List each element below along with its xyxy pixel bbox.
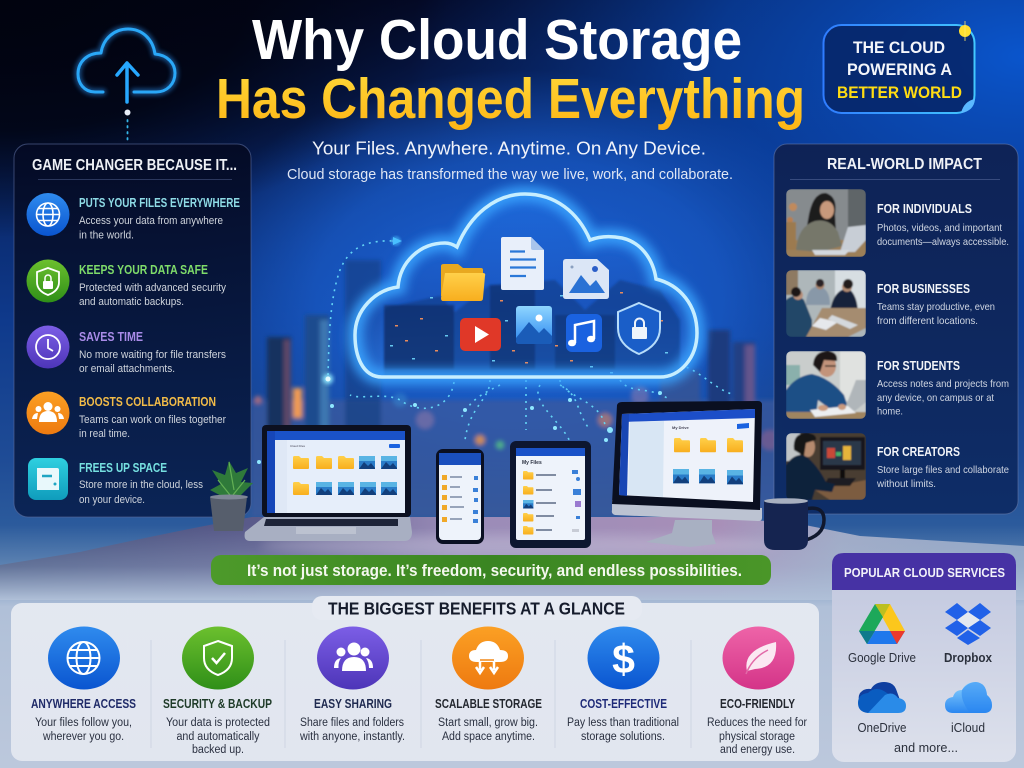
item: for individuals: documents—always accessible. — [877, 236, 1009, 248]
badge: the cloud powering a better world — [824, 21, 975, 113]
item: frees up space — [28, 458, 203, 506]
laptop — [245, 425, 412, 541]
icon: music — [566, 314, 602, 352]
icon: shield lock — [618, 303, 660, 354]
item: for students: Access notes and projects from — [877, 378, 1009, 390]
title line 1: Why Cloud Storage — [252, 8, 742, 72]
panel heading: real-world impact: REAL-WORLD IMPACT — [827, 156, 982, 173]
icon: folder — [441, 264, 485, 301]
panel: real-world impact — [774, 144, 1018, 514]
item: boosts collaboration — [26, 392, 226, 440]
item: frees up space: on your device. — [79, 494, 145, 506]
photo: business team — [786, 270, 866, 337]
benefit: easy sharing: EASY SHARING — [314, 697, 392, 711]
badge: the cloud powering a better world: POWERING A — [847, 60, 952, 79]
benefit: scalable storage — [435, 626, 542, 743]
icon: document — [501, 237, 544, 290]
logo: icloud — [945, 682, 992, 735]
photo: student writing — [786, 351, 866, 419]
item: saves time: No more waiting for file transfers — [79, 349, 226, 361]
title line 2: Has Changed Everything — [216, 67, 805, 131]
benefit: scalable storage: Add space anytime. — [442, 731, 535, 743]
benefit: cost-effective: Pay less than traditional — [567, 717, 679, 729]
panel: popular cloud services — [832, 553, 1016, 762]
benefit: easy sharing: Share files and folders — [300, 717, 404, 729]
item: keeps your data safe — [26, 260, 226, 308]
panel: game changer — [14, 144, 251, 517]
phone — [436, 449, 484, 544]
logo: onedrive — [858, 682, 907, 735]
item: for creators: FOR CREATORS — [877, 445, 960, 459]
plant — [210, 461, 253, 531]
item: boosts collaboration: Teams can work on files together — [79, 414, 226, 426]
item: for creators: without limits. — [876, 478, 936, 490]
panel heading: benefits: THE BIGGEST BENEFITS AT A GLANCE — [328, 598, 625, 618]
benefit: anywhere access — [31, 626, 136, 743]
benefit: eco-friendly: and energy use. — [720, 744, 795, 756]
item: boosts collaboration: BOOSTS COLLABORATION — [79, 395, 216, 409]
badge: the cloud powering a better world: THE CLOUD — [853, 38, 945, 57]
item: keeps your data safe: and automatic backups. — [79, 296, 184, 308]
item: puts your files everywhere: Access your data from anywhere — [79, 215, 223, 227]
monitor: My Drive — [672, 425, 689, 430]
benefit: scalable storage: SCALABLE STORAGE — [435, 697, 542, 711]
coffee mug — [764, 498, 824, 550]
logo: onedrive: OneDrive — [858, 721, 907, 735]
item: for students — [877, 359, 1009, 418]
table surface — [0, 517, 1024, 600]
logo: dropbox: Dropbox — [944, 651, 992, 665]
tablet — [510, 441, 591, 548]
panel heading: game changer: GAME CHANGER BECAUSE IT... — [32, 157, 237, 174]
logo: google drive: Google Drive — [848, 651, 916, 665]
subtitle: Cloud storage has transformed the way we live, work, and collaborate. — [287, 166, 733, 183]
city skyline backdrop — [251, 260, 781, 517]
logo: google drive — [848, 604, 916, 665]
tagline: Your Files. Anywhere. Anytime. On Any Device. — [312, 138, 706, 158]
icon: photo — [516, 306, 552, 344]
item: puts your files everywhere — [26, 193, 240, 242]
item: for individuals: FOR INDIVIDUALS — [877, 202, 972, 216]
icon: image document — [563, 259, 609, 299]
photo: creator at monitor — [786, 433, 866, 500]
item: for students: FOR STUDENTS — [877, 359, 960, 373]
benefit: easy sharing: with anyone, instantly. — [299, 731, 405, 743]
benefit: anywhere access: wherever you go. — [42, 731, 124, 743]
item: frees up space: Store more in the cloud, less — [79, 479, 203, 491]
benefit: scalable storage: Start small, grow big. — [438, 717, 538, 729]
benefit: cost-effective: $ — [612, 636, 635, 682]
title — [216, 8, 805, 131]
item: for students: home. — [877, 406, 903, 418]
item: keeps your data safe: Protected with advanced security — [79, 282, 226, 294]
benefit: anywhere access: ANYWHERE ACCESS — [31, 697, 136, 711]
benefit: cost-effective — [567, 626, 679, 743]
photo: individual with laptop — [786, 189, 866, 257]
skyline inside cloud — [384, 280, 680, 377]
green tagline banner: It’s not just storage. It’s freedom, security, and endless possibilities. — [247, 562, 742, 580]
item: for individuals: Photos, videos, and important — [877, 222, 1002, 234]
item: keeps your data safe: KEEPS YOUR DATA SAFE — [79, 263, 208, 277]
benefit: eco-friendly: ECO-FRIENDLY — [720, 697, 796, 711]
benefit: security and backup: backed up. — [192, 744, 244, 756]
benefit: anywhere access: Your files follow you, — [35, 717, 132, 729]
item: for businesses: FOR BUSINESSES — [877, 282, 970, 296]
benefit: eco-friendly: Reduces the need for — [707, 717, 807, 729]
green tagline banner — [211, 555, 771, 585]
item: boosts collaboration: in real time. — [79, 428, 130, 440]
item: for businesses — [877, 282, 995, 327]
item: for creators: Store large files and collaborate — [877, 464, 1009, 476]
logo: dropbox — [944, 603, 992, 665]
panel: biggest benefits — [11, 596, 819, 761]
item: for businesses: from different locations. — [877, 315, 978, 327]
benefit: eco-friendly: physical storage — [719, 731, 795, 743]
item: puts your files everywhere: in the world. — [79, 230, 134, 242]
benefit: security and backup: SECURITY & BACKUP — [163, 697, 272, 711]
benefit: security and backup — [163, 626, 272, 756]
small arrow node — [391, 236, 402, 246]
item: for businesses: Teams stay productive, even — [877, 301, 995, 313]
main cloud — [355, 194, 697, 377]
benefit: cost-effective: COST-EFFECTIVE — [580, 697, 667, 711]
benefit: eco-friendly — [707, 626, 807, 756]
item: saves time: or email attachments. — [79, 363, 175, 375]
benefit: easy sharing — [299, 626, 405, 743]
benefit: cost-effective: storage solutions. — [581, 731, 665, 743]
icon: video play — [460, 318, 501, 351]
item: for creators — [876, 445, 1009, 490]
laptop: Cloud Files — [290, 444, 306, 448]
benefit: security and backup: Your data is protected — [166, 717, 270, 729]
item: saves time — [26, 326, 226, 375]
glow nodes on network — [257, 238, 662, 464]
icon: cloud upload — [78, 29, 175, 143]
and more label: and more... — [894, 741, 958, 755]
item: frees up space: FREES UP SPACE — [79, 461, 167, 475]
tablet: My Files — [522, 460, 542, 466]
panel heading: services: POPULAR CLOUD SERVICES — [844, 565, 1005, 580]
benefit: security and backup: and automatically — [176, 731, 260, 743]
logo: icloud: iCloud — [951, 721, 985, 735]
monitor — [612, 401, 762, 547]
badge: the cloud powering a better world: BETTER WORLD — [837, 83, 962, 102]
network lines — [328, 241, 735, 470]
item: puts your files everywhere: PUTS YOUR FILES EVERYWHERE — [79, 196, 240, 210]
item: for students: any device, on campus or at — [877, 392, 994, 404]
item: for individuals — [877, 202, 1009, 248]
item: saves time: SAVES TIME — [79, 330, 143, 344]
